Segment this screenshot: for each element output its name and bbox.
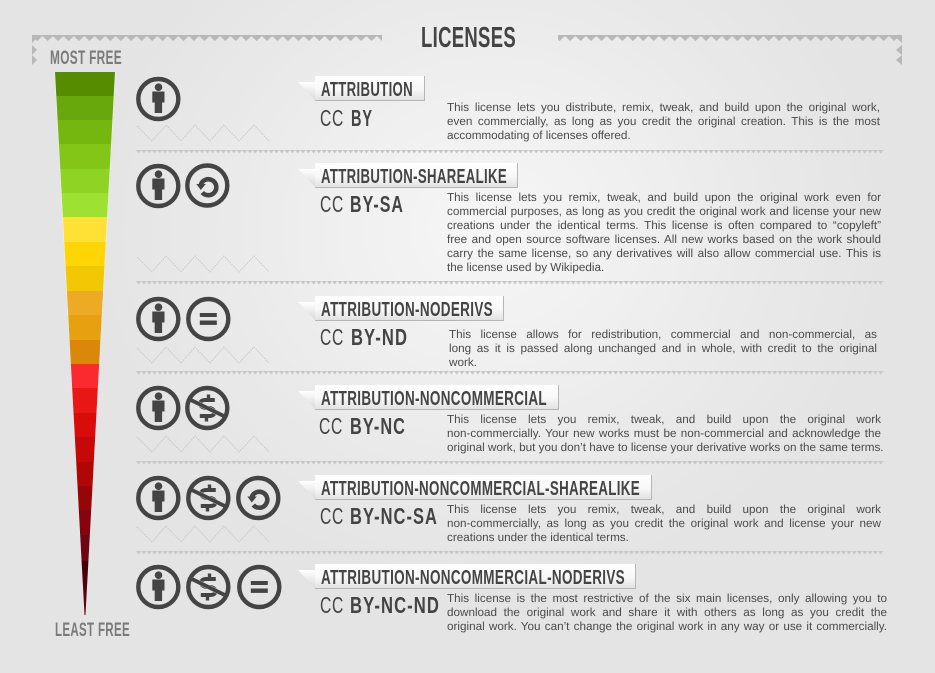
panel: attribution-sharealike — [136, 163, 881, 274]
ribbon heading: attribution-noderivs: ATTRIBUTION-NODERIVS — [321, 299, 493, 321]
description text — [447, 101, 880, 142]
ribbon heading: attribution-noncommercial — [298, 385, 558, 410]
description text: original work. You can’t change the original work in any way or use it commercially. — [447, 620, 887, 633]
description text: long as it is passed along unchanged and in whole, with credit to the original — [449, 342, 877, 355]
description text — [447, 191, 881, 274]
description text: free and open source software licenses. All new works based on the work should — [447, 233, 881, 246]
description text: the license used by Wikipedia. — [447, 261, 604, 274]
panel: attribution-noncommercial-noderivs — [136, 564, 887, 633]
zigzag — [137, 125, 269, 141]
ribbon heading: attribution-sharealike — [298, 163, 518, 188]
description text — [447, 503, 881, 544]
description text: This license lets you remix, tweak, and build upon the original work — [447, 413, 881, 426]
ribbon heading: attribution-noderivs — [298, 296, 504, 321]
panel: attribution-noncommercial — [136, 385, 884, 454]
code: cc by-nd — [320, 324, 408, 350]
code: cc by-nc — [319, 413, 406, 439]
ribbon heading: attribution-noncommercial-noderivs: ATTRIBUTION-NONCOMMERCIAL-NODERIVS — [321, 567, 625, 589]
ribbon heading: attribution-noncommercial-sharealike — [298, 475, 652, 500]
icons: by, nc, nd — [138, 567, 279, 607]
panel: attribution-noderivs — [136, 296, 877, 369]
zigzag — [137, 256, 269, 272]
panel: attribution-noncommercial-sharealike — [136, 475, 881, 544]
title: LICENSES — [421, 22, 516, 54]
description text: creations under the identical terms. — [447, 531, 629, 544]
code: cc by-nd: BY-ND — [351, 324, 408, 350]
ribbon heading: attribution — [298, 76, 424, 101]
description text: carry the same license, so any derivatives will also allow commercial use. This is — [447, 247, 881, 260]
description text: accommodating of licenses offered. — [447, 129, 631, 142]
icons: by — [138, 79, 178, 119]
icons: by, nc — [138, 388, 227, 428]
ribbon heading: attribution-noncommercial-sharealike: ATTRIBUTION-NONCOMMERCIAL-SHAREALIKE — [321, 478, 640, 500]
code: cc by-nc: CC — [319, 413, 343, 439]
description text: This license allows for redistribution, commercial and non-commercial, as — [449, 328, 877, 341]
description text: non-commercially. Your new works must be non-commercial and acknowledge the — [447, 427, 881, 440]
description text: creations under the identical terms. This license is often compared to “copyleft” — [447, 219, 881, 232]
code: cc by-nc-sa — [320, 503, 438, 529]
ribbon heading: attribution-sharealike: ATTRIBUTION-SHAREALIKE — [321, 166, 507, 188]
code: cc by-sa: BY-SA — [350, 191, 404, 217]
ribbon heading: attribution: ATTRIBUTION — [321, 79, 413, 101]
label: most free: MOST FREE — [50, 48, 122, 69]
code: cc by-sa: CC — [320, 191, 344, 217]
panel: attribution — [136, 76, 880, 142]
code: cc by-nc-nd — [320, 592, 440, 618]
code: cc by-nd: CC — [320, 324, 344, 350]
icons: by, nd — [138, 299, 228, 339]
description text: work. — [449, 356, 477, 369]
zigzag — [137, 526, 269, 542]
description text: This license lets you remix, tweak, and build upon the original work — [447, 503, 881, 516]
description text: non-commercially, as long as you credit the original work and license your new — [447, 517, 881, 530]
code: cc by — [320, 105, 373, 131]
description text — [447, 413, 884, 454]
description text: original work, but you don’t have to license your derivative works on the same terms. — [447, 441, 884, 454]
ribbon heading: attribution-noncommercial: ATTRIBUTION-NONCOMMERCIAL — [321, 388, 547, 410]
description text — [449, 328, 877, 369]
ribbon heading: attribution-noncommercial-noderivs — [298, 564, 636, 589]
description text: This license is the most restrictive of the six main licenses, only allowing you to — [447, 592, 887, 605]
label: least free: LEAST FREE — [55, 620, 130, 641]
description text — [447, 592, 887, 633]
code: cc by-nc: BY-NC — [350, 413, 406, 439]
code: cc by-nc-sa: CC — [320, 503, 344, 529]
description text: commercial purposes, as long as you credit the original work and license your new — [447, 205, 881, 218]
description text: This license lets you distribute, remix, tweak, and build upon the original work, — [447, 101, 880, 114]
code: cc by-sa — [320, 191, 404, 217]
description text: download the original work and share it with others as long as you credit the — [447, 606, 887, 619]
zigzag — [137, 347, 269, 363]
description text: even commercially, as long as you credit the original creation. This is the most — [447, 115, 880, 128]
code: cc by-nc-sa: BY-NC-SA — [350, 503, 438, 529]
zigzag — [137, 436, 269, 452]
icons: by, sa — [138, 166, 227, 206]
icons: by, nc, sa — [138, 478, 278, 518]
code: cc by: CC — [320, 105, 344, 131]
code: cc by-nc-nd: CC — [320, 592, 344, 618]
description text: This license lets you remix, tweak, and build upon the original work even for — [447, 191, 881, 204]
code: cc by: BY — [351, 105, 373, 131]
code: cc by-nc-nd: BY-NC-ND — [350, 592, 440, 618]
